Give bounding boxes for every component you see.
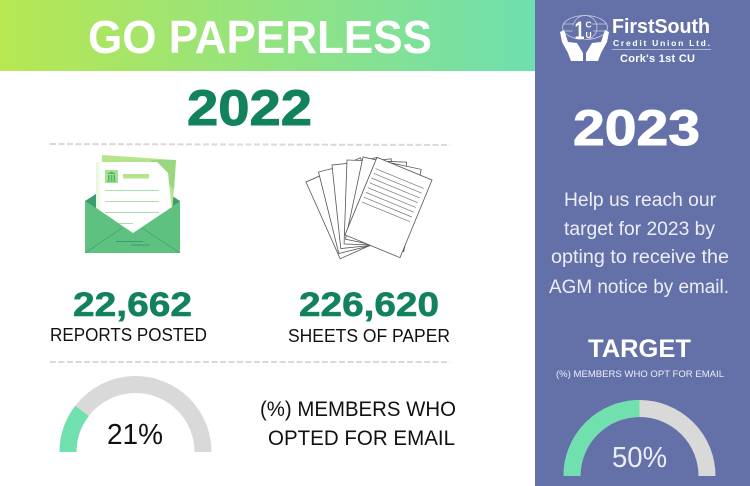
logo: FirstSouth Credit Union: 1 — [574, 17, 585, 45]
stat: sheets of paper: SHEETS OF PAPER — [288, 326, 450, 346]
logo: FirstSouth Credit Union: C — [586, 20, 592, 30]
logo: FirstSouth Credit Union: FirstSouth — [612, 16, 710, 38]
icon: fan of paper sheets — [306, 157, 432, 259]
gauge: 50 percent — [572, 408, 707, 476]
gauge: 21 percent: 21% — [107, 419, 163, 451]
icon: open envelope with letter — [85, 155, 180, 253]
label: members who opted for email: OPTED FOR EMAIL — [268, 427, 455, 450]
gauge: 21 percent — [68, 384, 203, 452]
icon: bank badge — [105, 170, 118, 183]
text block: call to action — [549, 190, 729, 298]
title: GO PAPERLESS — [88, 11, 432, 63]
gauge: 50 percent: 50% — [612, 442, 667, 474]
label: members who opted for email: (%) MEMBERS WHO — [260, 398, 456, 421]
logo: FirstSouth Credit Union: U — [586, 30, 592, 40]
text block: call to action: AGM notice by email. — [549, 277, 729, 298]
stat: sheets of paper: 226,620 — [299, 286, 439, 324]
logo: FirstSouth Credit Union — [560, 16, 711, 65]
heading: 2022: 2022 — [187, 80, 312, 136]
text block: call to action: opting to receive the — [551, 247, 729, 268]
heading: 2023: 2023 — [573, 100, 700, 156]
header banner — [0, 0, 535, 71]
caption: members who opt for email: (%) MEMBERS WHO OPT FOR EMAIL — [556, 369, 724, 380]
panel: 2023 target — [535, 0, 750, 486]
text block: call to action: Help us reach our — [564, 190, 717, 211]
label: members who opted for email — [260, 398, 456, 450]
heading: target: TARGET — [588, 335, 691, 363]
logo: FirstSouth Credit Union: Credit Union Ltd. — [613, 38, 710, 48]
text block: call to action: target for 2023 by — [564, 219, 715, 240]
stat: reports posted: REPORTS POSTED — [50, 325, 207, 345]
stat: reports posted — [50, 286, 207, 345]
stat: reports posted: 22,662 — [73, 286, 192, 324]
logo: FirstSouth Credit Union: Cork's 1st CU — [620, 53, 695, 65]
stat: sheets of paper — [288, 286, 450, 346]
